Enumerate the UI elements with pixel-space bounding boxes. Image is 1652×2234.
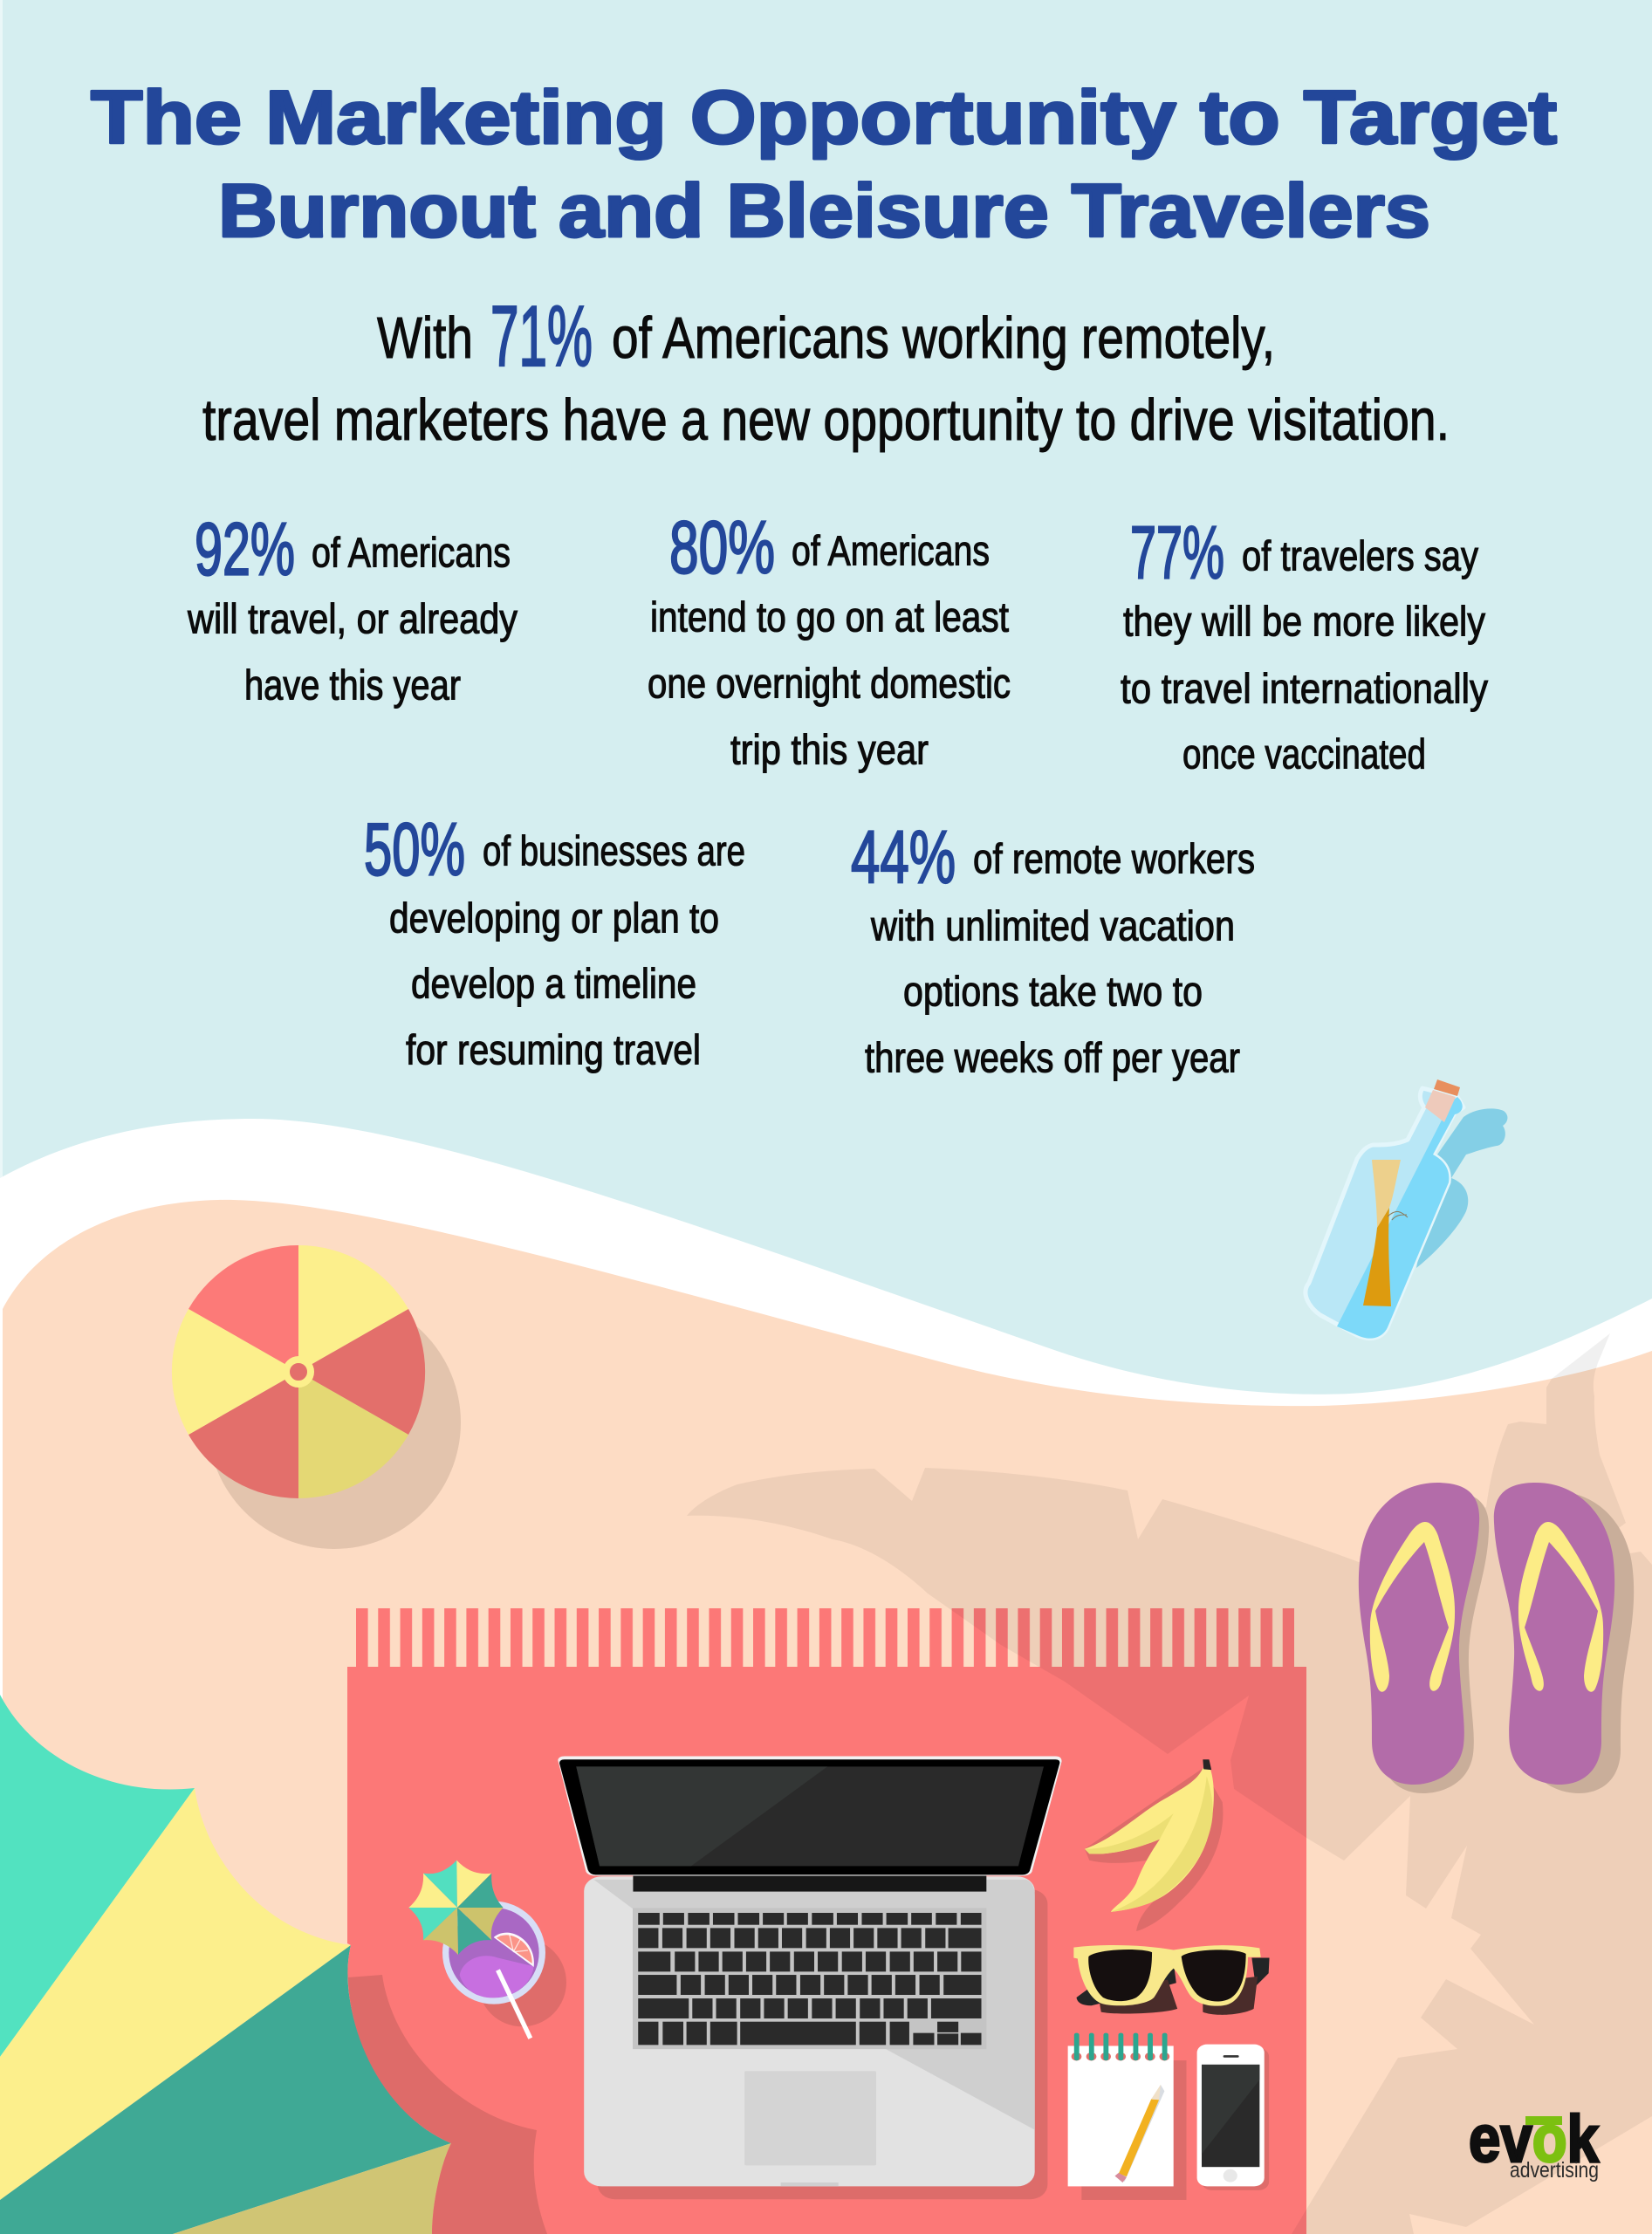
icon: right flip flop: [1494, 1483, 1634, 1793]
stat: 50%: for resuming travel: [406, 1028, 701, 1073]
stat: 77%: 77%: [1130, 511, 1224, 595]
beach umbrella: [0, 1695, 451, 2234]
stat: 50%: [364, 808, 745, 1073]
stat: 77%: [1121, 511, 1488, 778]
intro statement: With: [377, 305, 473, 371]
stat: 80%: [648, 506, 1011, 773]
intro statement: of Americans working remotely,: [612, 305, 1275, 371]
stat: 77%: they will be more likely: [1123, 599, 1485, 646]
intro statement: [202, 288, 1450, 453]
stat: 80%: 80%: [669, 506, 775, 590]
stat: 80%: one overnight domestic: [648, 661, 1011, 707]
palm tree shadow: [687, 1333, 1652, 2234]
stat: 77%: once vaccinated: [1182, 731, 1426, 778]
stat: 50%: of businesses are: [483, 829, 745, 874]
icon: laptop: [558, 1757, 1062, 2199]
stat: 44%: of remote workers: [973, 836, 1255, 883]
stat: 92%: 92%: [195, 508, 295, 592]
stat: 44%: options take two to: [903, 969, 1203, 1016]
icon: smartphone: [1197, 2045, 1269, 2190]
stat: 92%: [187, 508, 518, 709]
icon: banana: [1085, 1759, 1223, 1931]
icon: message in a bottle: [1306, 1079, 1507, 1339]
stat: 44%: with unlimited vacation: [870, 904, 1235, 949]
stat: 50%: developing or plan to: [389, 895, 719, 942]
icon: beach ball: [172, 1245, 461, 1549]
stat: 80%: trip this year: [730, 728, 929, 773]
stat: 92%: will travel, or already: [187, 597, 518, 642]
title: Burnout and Bleisure Travelers: [218, 169, 1430, 253]
icon: left flip flop: [1359, 1483, 1489, 1793]
stat: 92%: of Americans: [312, 531, 511, 576]
stat: 44%: three weeks off per year: [865, 1035, 1240, 1082]
stat: 77%: of travelers say: [1242, 534, 1478, 579]
wave foam: [0, 1119, 1652, 2234]
stat: 50%: develop a timeline: [411, 962, 696, 1007]
beach towel: [347, 1608, 1306, 2234]
title: [91, 76, 1557, 253]
stat: 44%: [851, 817, 1255, 1082]
icon: cocktail with umbrella: [408, 1861, 566, 2036]
logo: evok advertising: advertising: [1510, 2158, 1599, 2183]
intro statement: 71%: [490, 288, 593, 384]
logo: evok advertising: evok: [1469, 2102, 1600, 2176]
stat: 44%: 44%: [851, 817, 956, 899]
icon: notepad with pencil: [1068, 2033, 1186, 2200]
stat: 80%: of Americans: [792, 529, 990, 574]
sand: [3, 1200, 1652, 2234]
stat: 80%: intend to go on at least: [650, 595, 1009, 641]
stat: 92%: have this year: [244, 663, 461, 709]
icon: sunglasses: [1073, 1945, 1270, 2015]
title: The Marketing Opportunity to Target: [91, 76, 1557, 160]
stat: 77%: to travel internationally: [1121, 667, 1488, 712]
stat: 50%: 50%: [364, 808, 465, 892]
